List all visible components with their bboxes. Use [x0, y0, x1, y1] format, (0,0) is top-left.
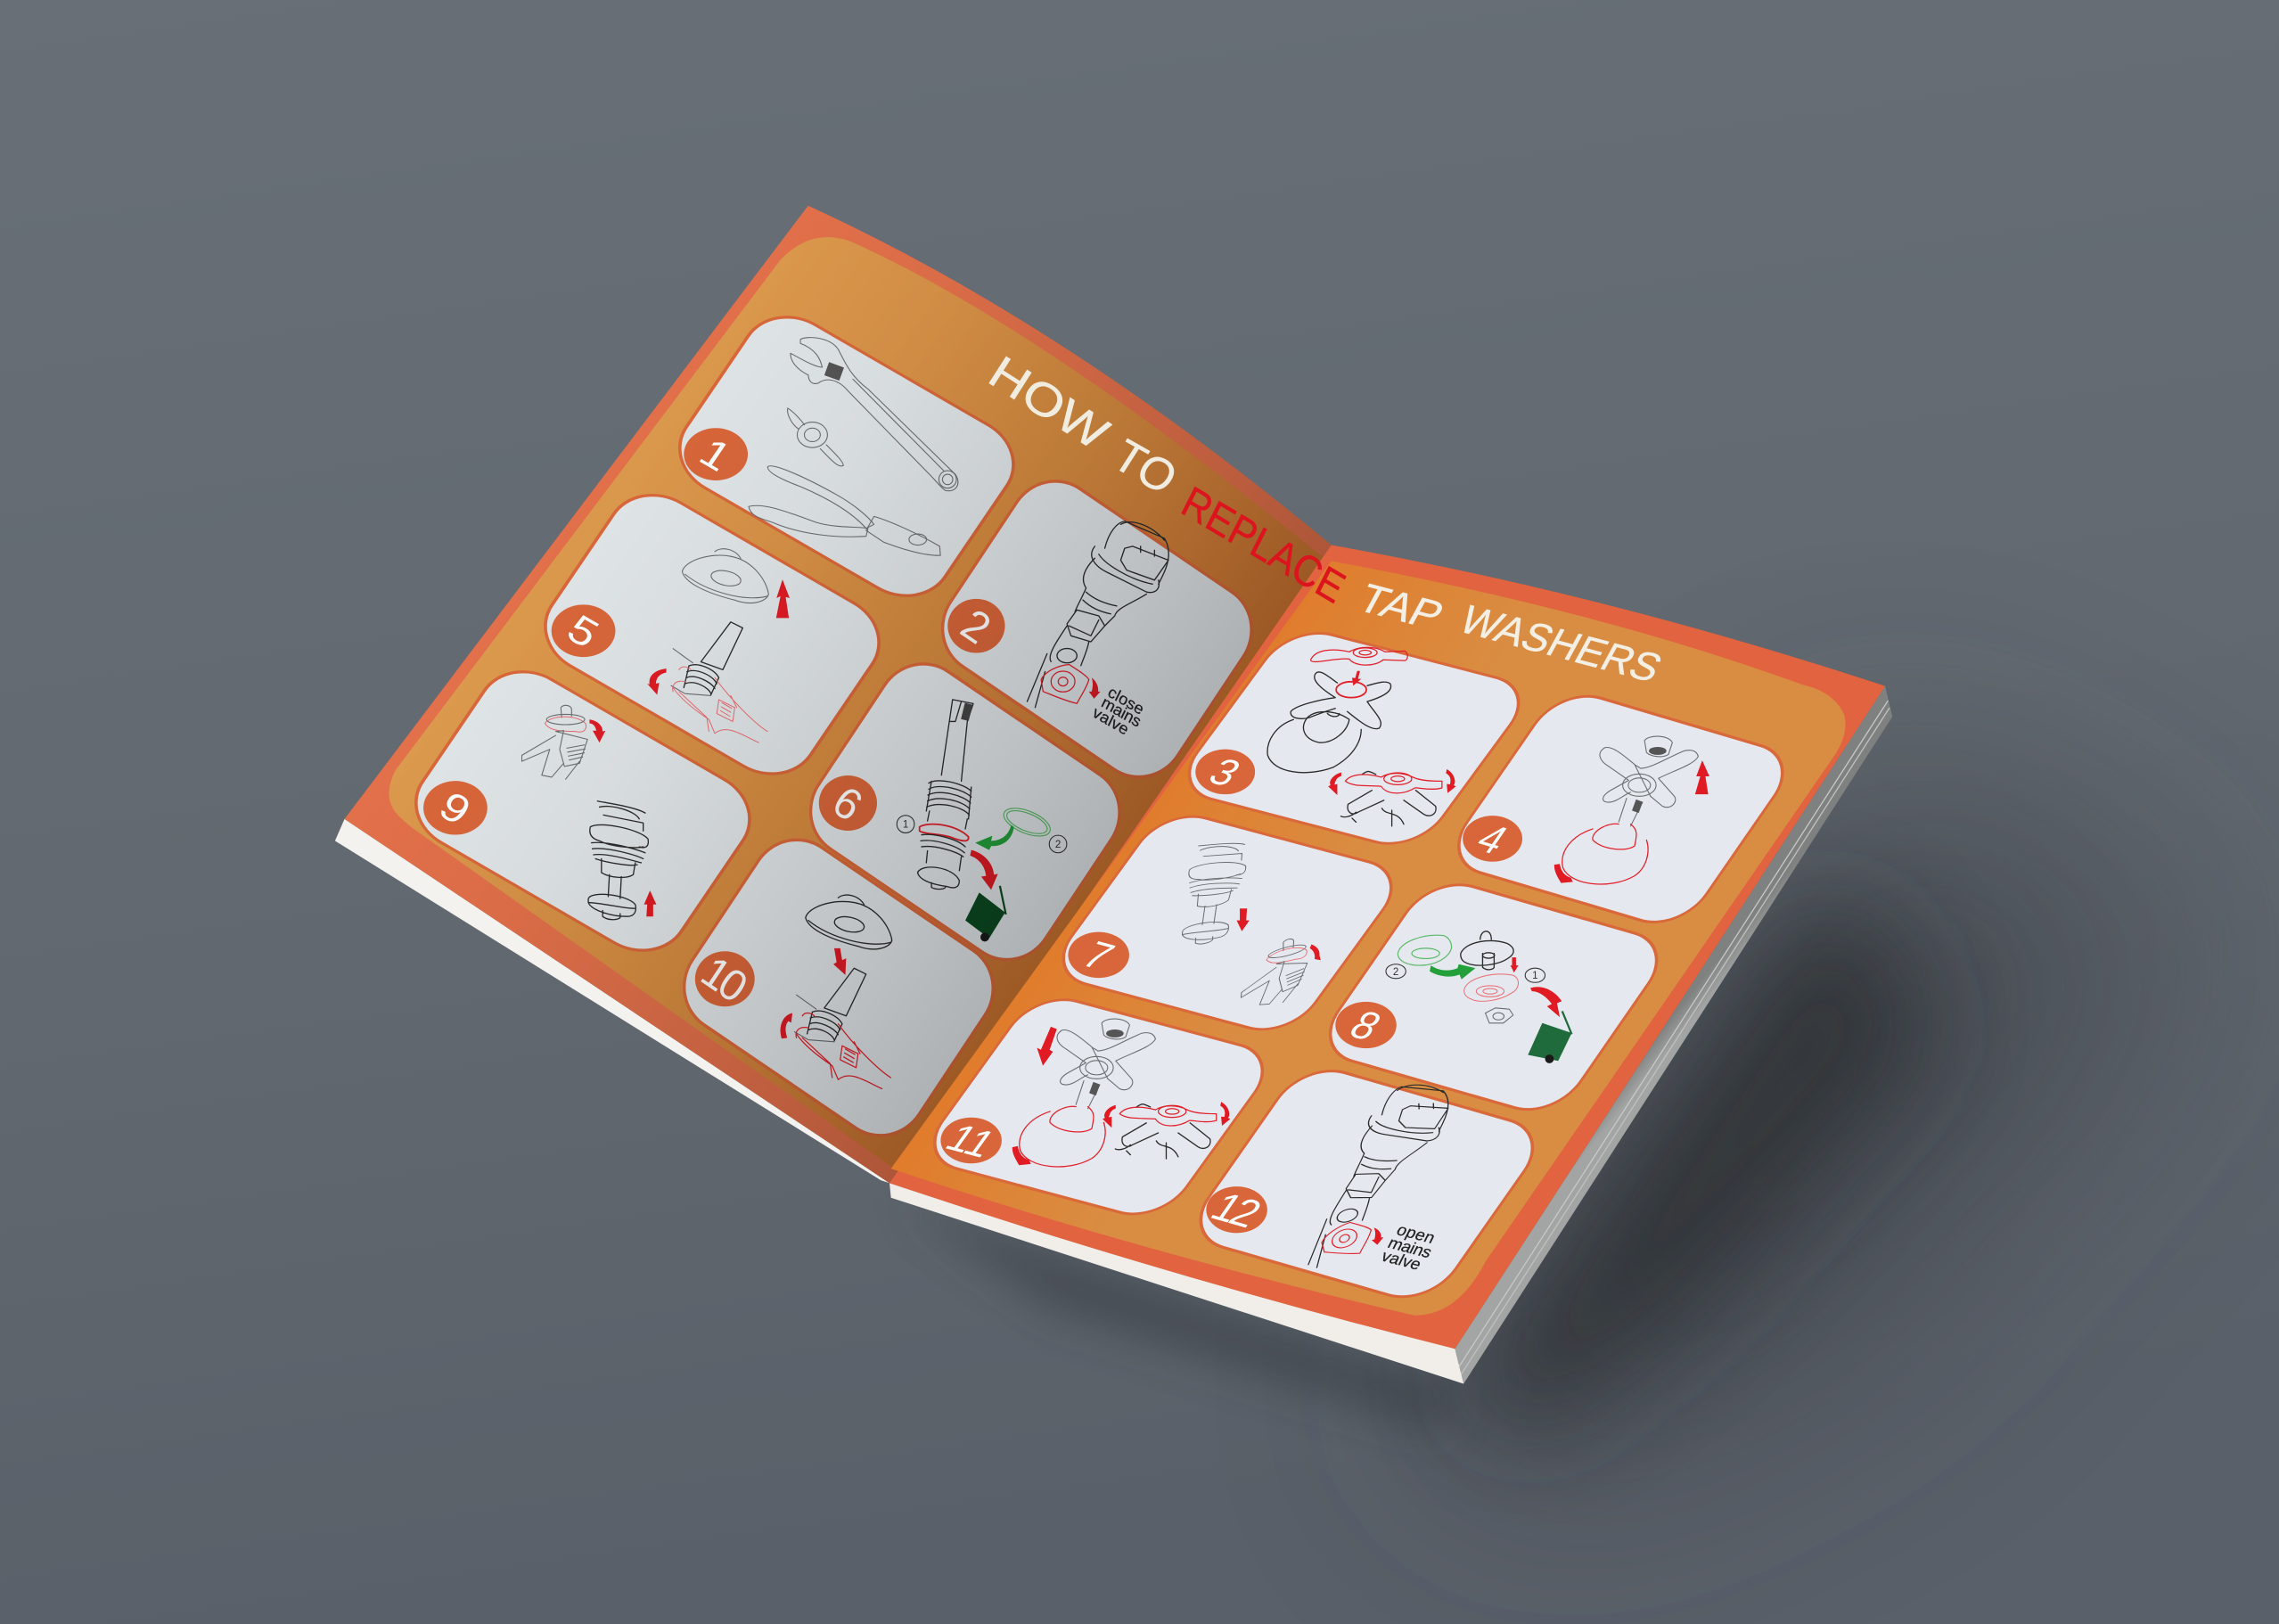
panel 5: remove cover	[528, 479, 897, 791]
panel 2: close mains valve	[925, 463, 1269, 795]
book shadow	[901, 756, 2209, 1482]
number 6: 6	[824, 777, 871, 831]
icon: cover and stem	[781, 895, 892, 1088]
icon: cover and stem	[647, 549, 790, 742]
icon: cross handle, dome and cap	[1012, 1019, 1230, 1167]
label: open mains valve: mains	[1385, 1234, 1435, 1261]
number 7: 7	[1074, 933, 1123, 978]
panel 7: unscrew jumper	[1045, 808, 1410, 1038]
number 9	[423, 781, 488, 835]
panel 4: lift handle	[1440, 686, 1800, 932]
number 12: 12	[1202, 1184, 1271, 1236]
icon: washers, arrows and bin: 1	[1532, 970, 1538, 981]
panel 8: replace washer	[1312, 875, 1675, 1120]
panel 6: replace washer	[793, 646, 1137, 978]
spine shading on left page	[344, 206, 1332, 1183]
title: WASHERS	[1452, 597, 1669, 691]
icon: stem, washers, arrows and bin: 1	[903, 819, 908, 831]
right page	[889, 545, 1885, 1349]
icon: valve with red handle	[1027, 521, 1168, 708]
icon: stem, washers, arrows and bin	[897, 700, 1067, 941]
number 9: 9	[431, 783, 479, 833]
title: HOW	[980, 347, 1118, 461]
number 3: 3	[1201, 750, 1250, 794]
paper stack edges	[335, 686, 1892, 1383]
panel 3: remove handle cap	[1171, 624, 1537, 852]
icon: wrench, handle, pliers	[749, 338, 958, 555]
panel 1: tools	[662, 300, 1031, 612]
icon: tap handle	[1267, 647, 1455, 826]
panel 10: refit cover	[667, 822, 1011, 1153]
icon: jumper and pliers	[1181, 833, 1321, 1013]
title: TO	[1103, 431, 1186, 504]
number 8: 8	[1341, 1003, 1390, 1048]
panel 9: pliers and jumper valve	[398, 655, 767, 967]
title: TAP	[1350, 576, 1451, 638]
left page	[344, 206, 1332, 1183]
number 4: 4	[1468, 816, 1517, 862]
left page inner field	[389, 237, 1332, 1169]
panel 12: open mains valve	[1182, 1061, 1551, 1307]
label: open mains valve	[1379, 1220, 1439, 1273]
number 1: 1	[692, 431, 739, 480]
title: REPLACE	[1175, 476, 1353, 612]
number 11: 11	[938, 1116, 1004, 1166]
number 10: 10	[693, 947, 756, 1013]
icon: valve with red handle	[1300, 1075, 1455, 1270]
icon: pliers and jumper valve	[522, 705, 656, 920]
label: close mains valve: close	[1105, 683, 1147, 718]
label: close mains valve: valve	[1090, 703, 1131, 739]
label: open mains valve: valve	[1379, 1247, 1424, 1273]
icon: washers, arrows and bin: 2	[1393, 966, 1398, 978]
label: close mains valve: mains	[1099, 693, 1144, 731]
number 2: 2	[953, 600, 999, 654]
label: close mains valve	[1090, 683, 1147, 739]
right page inner field	[891, 561, 1846, 1316]
title	[980, 347, 1669, 691]
number 5: 5	[559, 607, 607, 657]
right page border	[889, 545, 1885, 1349]
icon: washers, arrows and bin	[1386, 931, 1571, 1063]
left page border	[344, 206, 1332, 1183]
panel 11: refit handle	[916, 990, 1281, 1223]
icon: cross handle and dome	[1554, 736, 1709, 884]
label: open mains valve: open	[1394, 1220, 1439, 1247]
icon: stem, washers, arrows and bin: 2	[1055, 839, 1061, 850]
booklet	[335, 206, 1892, 1383]
